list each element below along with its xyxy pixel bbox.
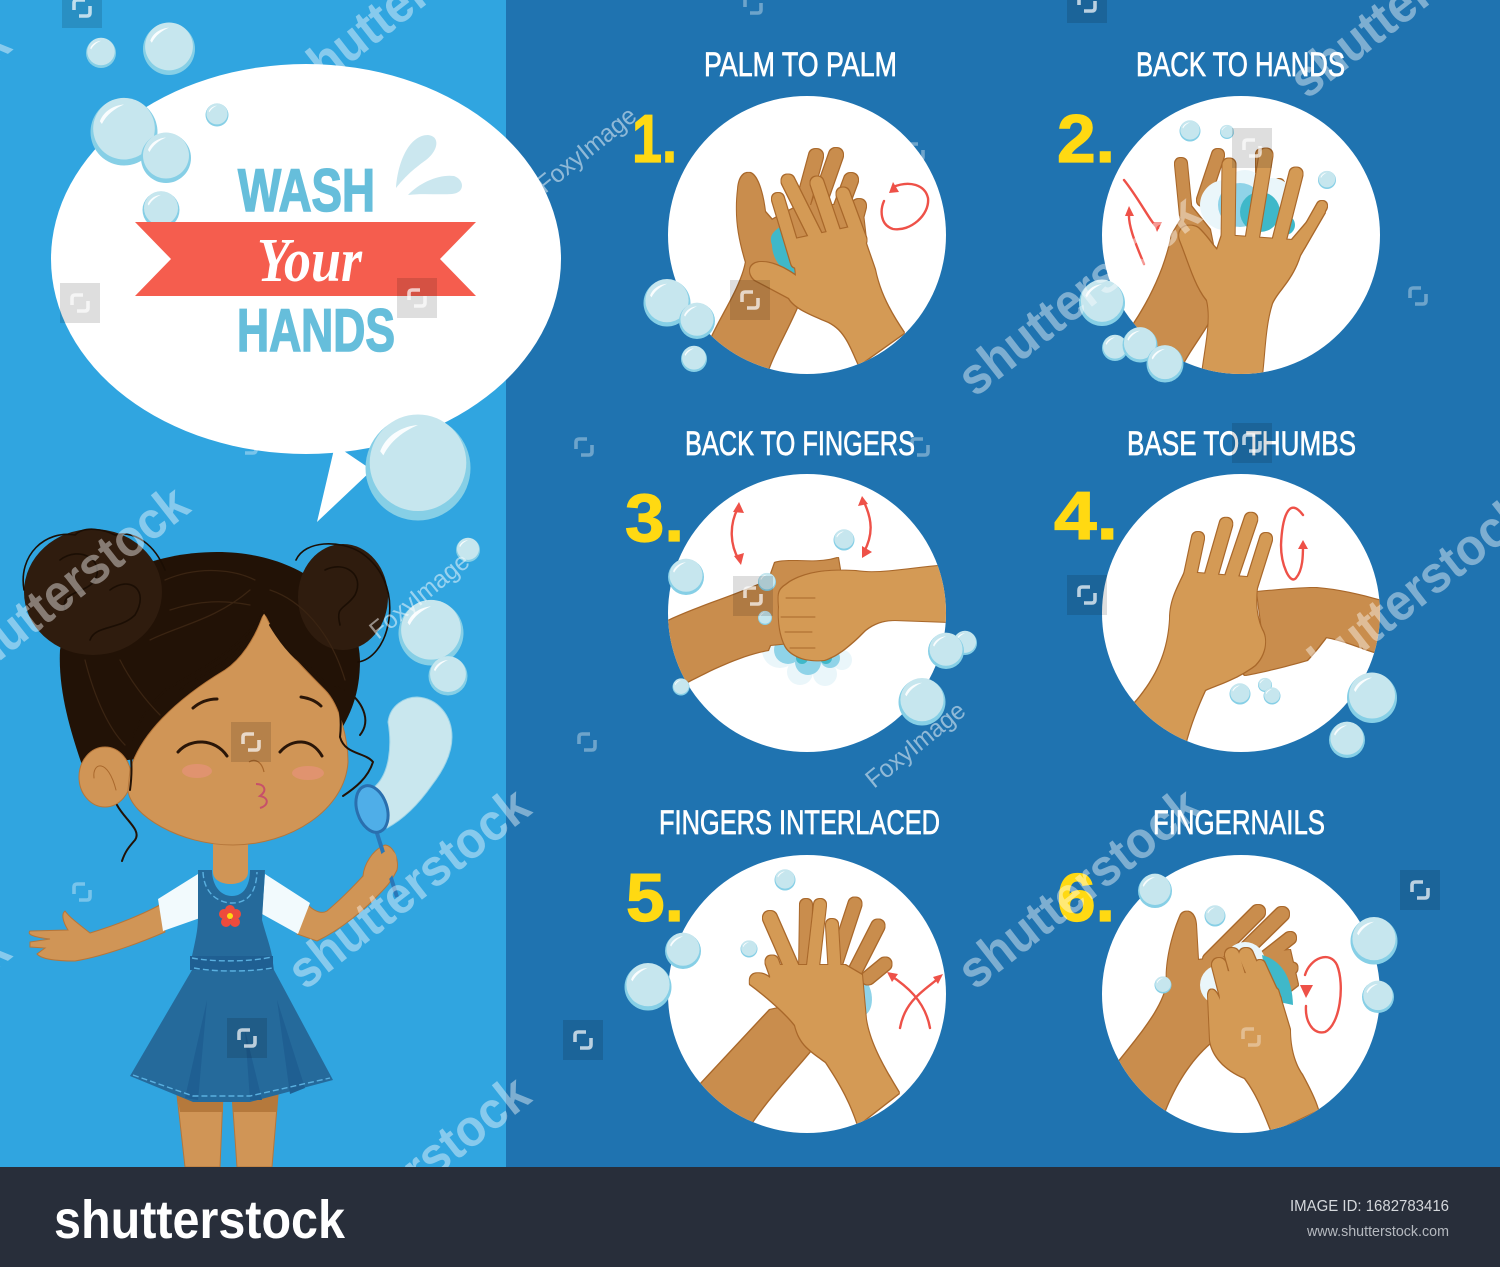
hair buns	[24, 529, 388, 655]
left arm and hand	[29, 905, 165, 961]
title: PALM TO PALM	[704, 46, 897, 84]
bubbles	[624, 869, 796, 1010]
website: www.shutterstock.com	[1306, 1224, 1449, 1240]
up and down arrows	[1124, 180, 1162, 264]
step 3: back to fingers	[625, 425, 977, 752]
left panel background	[0, 0, 506, 1167]
image id: IMAGE ID: 1682783416	[1290, 1198, 1449, 1215]
double arrows	[732, 496, 872, 565]
bubbles around speech bubble	[86, 22, 480, 696]
circle	[1102, 474, 1380, 752]
soap and foam	[1200, 942, 1293, 1005]
title: FINGERS INTERLACED	[659, 804, 940, 842]
right panel background	[506, 0, 1500, 1167]
foam	[1200, 170, 1295, 235]
number: 6.	[1057, 860, 1115, 936]
circle	[668, 855, 946, 1133]
watermarks: shutterstock: shutterstock	[947, 776, 1211, 1000]
bubbles	[1079, 120, 1336, 382]
dress	[130, 870, 333, 1102]
bubble wand	[350, 782, 397, 897]
right arm and hand	[297, 845, 397, 941]
footer bar	[0, 1167, 1500, 1267]
ear	[79, 747, 131, 807]
legs	[177, 1095, 278, 1167]
rotation arrow	[882, 182, 928, 229]
watermarks: shutterstock: shutterstock	[277, 776, 541, 1000]
blown soap bubble	[373, 697, 452, 828]
number: 2.	[1057, 101, 1115, 177]
heading: wash your hands: HANDS	[237, 297, 395, 364]
watermark bracket marks	[74, 0, 1426, 1048]
circle	[1102, 96, 1380, 374]
hair highlights	[85, 571, 345, 745]
neck	[213, 840, 248, 884]
eyes and brows	[178, 697, 322, 756]
watermarks: foxyimage	[364, 101, 971, 794]
heading: wash your hands: WASH	[238, 157, 375, 224]
step 4: base to thumbs	[1054, 425, 1397, 758]
hands	[700, 155, 904, 370]
face	[128, 612, 348, 845]
rotation arrow	[1300, 957, 1341, 1032]
speech bubble	[51, 64, 561, 522]
hands	[1110, 912, 1318, 1132]
hands	[700, 904, 899, 1125]
bubbles	[1230, 672, 1397, 758]
crossed arrows	[887, 972, 943, 1028]
rotation arrow	[1281, 508, 1308, 579]
step 1: palm to palm	[632, 46, 946, 374]
hands	[1125, 519, 1385, 745]
title: FINGERNAILS	[1153, 804, 1325, 842]
shirt sleeves	[158, 874, 310, 934]
hair back	[60, 552, 360, 765]
footer logo: shutterstock	[54, 1190, 346, 1250]
watermarks: foxyimage: FoxyImage	[860, 696, 971, 794]
watermark square icons	[60, 0, 1440, 1060]
cheeks	[182, 764, 212, 778]
step 5: fingers interlaced	[624, 804, 946, 1133]
number: 5.	[626, 860, 684, 936]
heading: wash your hands	[135, 157, 476, 364]
circle	[668, 474, 946, 752]
number: 4.	[1054, 478, 1118, 554]
step 2: back to hands	[1057, 46, 1380, 382]
bubbles	[1138, 874, 1398, 1013]
title: BASE TO THUMBS	[1127, 425, 1356, 463]
ribbon	[135, 222, 476, 296]
watermarks: foxyimage: FoxyImage	[364, 547, 475, 645]
heading: wash your hands: Your	[257, 227, 363, 295]
flower	[219, 905, 241, 927]
number: 1.	[632, 101, 677, 177]
watermarks: foxyimage: FoxyImage	[531, 101, 642, 199]
circle	[1102, 855, 1380, 1133]
bubbles	[644, 279, 715, 372]
number: 3.	[625, 480, 684, 556]
step 6: fingernails	[1057, 804, 1398, 1133]
watermarks: shutterstock: shutterstock	[947, 183, 1211, 407]
nose	[249, 760, 264, 772]
icon: water drops	[396, 135, 462, 195]
title: BACK TO HANDS	[1136, 46, 1345, 84]
kissing mouth	[256, 784, 267, 808]
circle	[668, 96, 946, 374]
girl character blowing bubble	[23, 529, 452, 1167]
hands	[660, 558, 950, 690]
bun curls	[23, 529, 390, 662]
title: BACK TO FINGERS	[685, 425, 915, 463]
hands	[1110, 155, 1325, 375]
bubbles	[668, 529, 977, 726]
foam	[762, 632, 852, 686]
hair strands and curls	[117, 612, 373, 861]
